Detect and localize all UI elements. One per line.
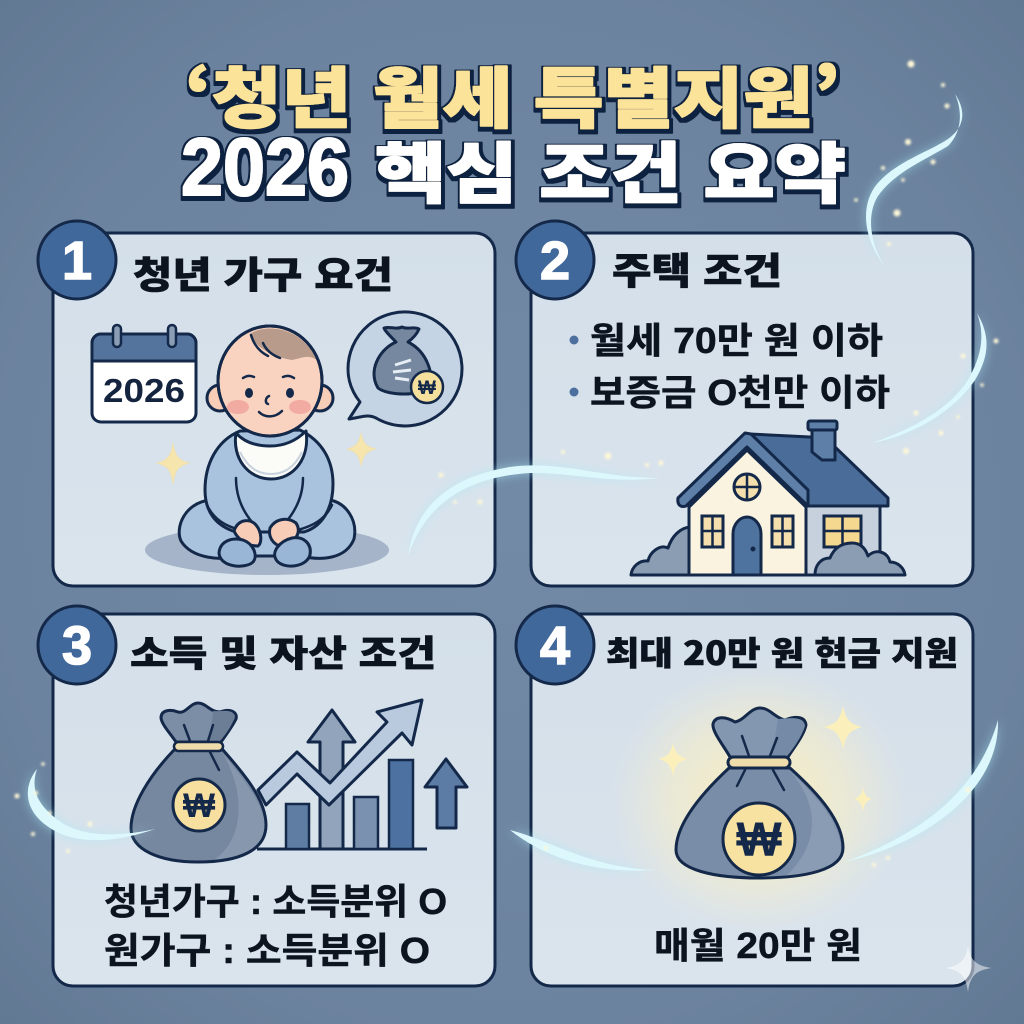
icon: sparkle left <box>157 443 189 484</box>
bullet list: rent and deposit: 보증금 O천만 이하 <box>590 372 890 413</box>
heading: youth household: 청년 가구 요건 <box>133 245 393 299</box>
chart: rising bars and arrows <box>257 700 467 849</box>
badge: number 4 <box>516 606 594 684</box>
icon: sparkles <box>659 706 872 812</box>
watermark star <box>945 945 992 992</box>
title: ‘청년 월세 특별지원’ <box>185 46 840 142</box>
badge: number 2 <box>516 221 594 299</box>
bullet list: rent and deposit: 월세 70만 원 이하 <box>590 320 883 361</box>
title: 핵심 조건 요약 <box>375 121 846 217</box>
badge: number 1 <box>38 221 116 299</box>
glow behind bag <box>609 665 909 935</box>
icon: money bag: ₩ <box>183 787 216 825</box>
icon: calendar 2026 <box>92 325 196 422</box>
icon: calendar 2026: 2026 <box>103 372 185 409</box>
title: 2026 <box>181 122 349 213</box>
icon: large money bag <box>676 708 843 878</box>
panel: 3 income and assets <box>38 606 495 986</box>
badge: number 3: 3 <box>62 616 92 676</box>
heading: income and assets: 소득 및 자산 조건 <box>130 625 436 677</box>
text block: income decile <box>104 881 447 971</box>
badge: number 2: 2 <box>540 231 570 291</box>
panel: 4 cash support <box>516 606 973 986</box>
badge: number 3 <box>38 606 116 684</box>
icon: speech bubble with money bag: ₩ <box>418 378 436 399</box>
icon: large money bag: ₩ <box>736 814 782 867</box>
bullet list: rent and deposit <box>570 320 890 413</box>
icon: sparkle right <box>347 433 376 466</box>
panel: 1 youth household <box>38 221 495 586</box>
icon: money bag <box>131 703 266 862</box>
badge: number 4: 4 <box>540 616 570 676</box>
illustration: house <box>631 421 905 575</box>
heading: housing: 주택 조건 <box>612 241 782 295</box>
badge: number 1: 1 <box>62 231 92 291</box>
text block: income decile: 원가구 : 소득분위 O <box>104 930 430 971</box>
icon: speech bubble with money bag <box>348 312 462 426</box>
decorative light swirls <box>14 60 998 871</box>
panel: 2 housing <box>516 221 973 586</box>
text block: income decile: 청년가구 : 소득분위 O <box>104 881 447 922</box>
text: monthly amount: 매월 20만 원 <box>654 925 862 966</box>
illustration: baby <box>145 326 389 575</box>
title <box>181 46 846 217</box>
heading: cash support: 최대 20만 원 현금 지원 <box>606 627 958 675</box>
